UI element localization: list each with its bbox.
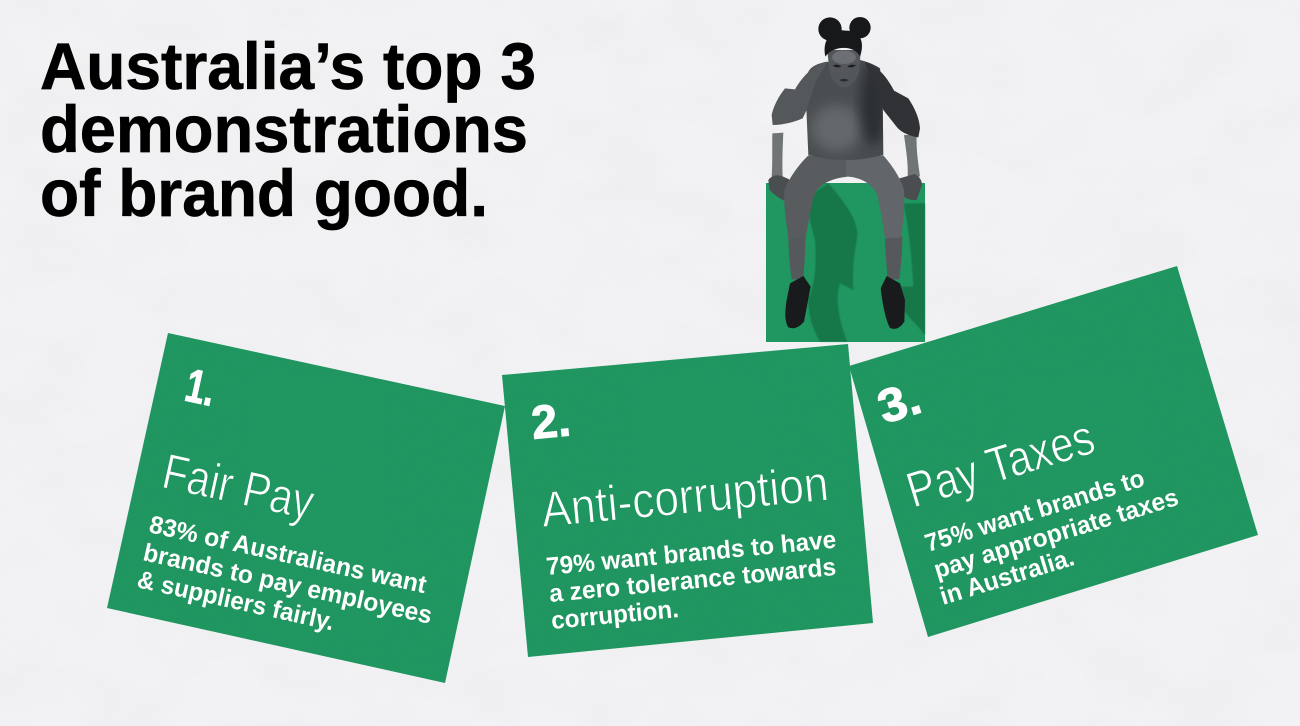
card 1 heading: Fair Pay [158,443,319,530]
panel: card 1 Fair Pay [100,330,510,690]
card 1 body text: 83% of Australians want [147,511,430,599]
card 3 body text [922,464,1182,611]
panel: green block seat [766,183,925,342]
card 2 number: 2. [529,393,573,449]
card 2 body text: 79% want brands to have [545,526,837,581]
card 3 heading: Pay Taxes [900,409,1101,519]
panel: card 3 Pay Taxes [845,262,1263,642]
card 2 body text: corruption. [550,595,680,635]
panel: card 2 Anti-corruption [498,340,878,660]
card 3 number: 3. [871,370,927,434]
title: of brand good. [40,156,488,230]
card 1 body text: brands to pay employees [141,539,435,630]
forearms [772,133,920,177]
card 1 body text: & suppliers fairly. [135,566,337,636]
card 3 body text: pay appropriate taxes [931,483,1182,584]
card 2 body text [545,526,837,635]
sweater [772,60,920,160]
trousers [784,155,904,239]
hair [818,17,871,57]
title: demonstrations [40,92,528,166]
card 3 body text: in Australia. [937,543,1078,611]
card 3 body text: 75% want brands to [922,464,1148,558]
shoes [785,276,905,329]
legs [788,236,902,279]
card 2 heading: Anti-corruption [539,455,831,538]
face [827,50,861,87]
title: Australia’s top 3 [40,29,536,103]
illustration: seated woman looking down [768,17,922,329]
card 1 number: 1. [181,358,220,416]
title [40,29,536,230]
card 2 body text: a zero tolerance towards [548,553,837,608]
hands [768,174,922,201]
